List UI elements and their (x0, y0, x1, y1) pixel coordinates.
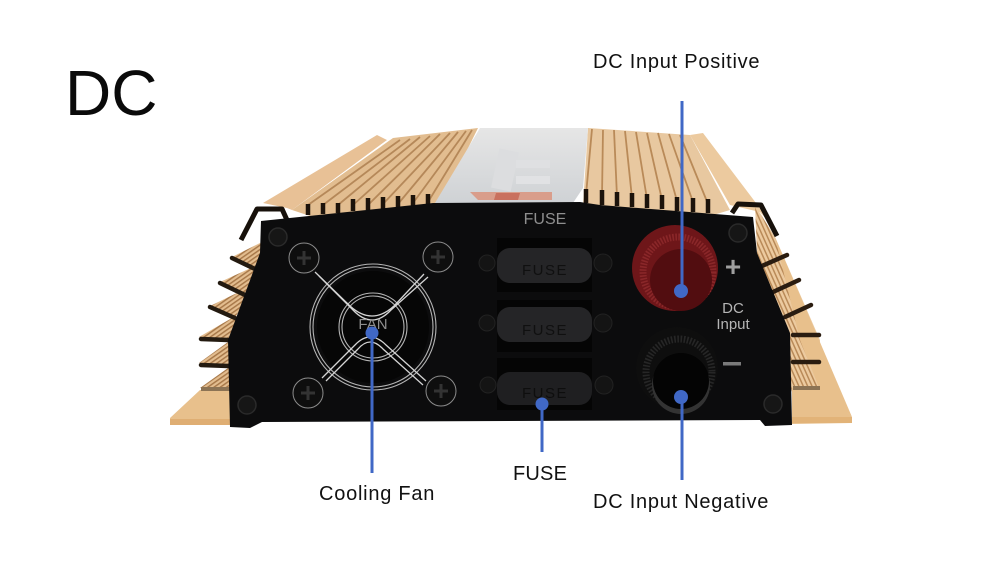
panel label: DC Input: DC (722, 300, 744, 317)
title: DC (65, 57, 157, 129)
callout: Cooling Fan: Cooling Fan (319, 483, 435, 505)
callout: DC Input Negative: DC Input Negative (593, 491, 769, 513)
fuse holders (479, 238, 613, 410)
callout: Cooling Fan (319, 326, 435, 505)
cooling fan (289, 242, 456, 408)
heat sink fins: top right (583, 128, 778, 232)
negative terminal (636, 327, 718, 414)
panel label: fuse: FUSE (524, 211, 566, 228)
panel label: minus (723, 362, 741, 366)
fan label: FAN (358, 316, 388, 333)
fuse holders: FUSE (522, 322, 568, 339)
heat sink fins: top left (263, 128, 478, 216)
fan screws (289, 242, 456, 408)
callout: FUSE: FUSE (513, 463, 567, 485)
black front panel (228, 202, 792, 428)
heat sink fins: right side (755, 205, 852, 424)
positive terminal (632, 225, 718, 311)
fuse holders: FUSE (522, 262, 568, 279)
callout: FUSE (513, 398, 567, 485)
fuse holders: FUSE (522, 385, 568, 402)
heat sink fins: left side (170, 242, 262, 425)
mounting brackets (241, 204, 777, 240)
panel label: DC Input: Input (716, 316, 751, 333)
callout: DC Input Negative (593, 390, 769, 513)
corner screws (238, 224, 782, 414)
callout: DC Input Positive: DC Input Positive (593, 51, 760, 73)
callout: DC Input Positive (593, 51, 760, 298)
inverter unit (170, 128, 852, 428)
fan guard wires (315, 272, 428, 385)
panel label: plus: + (725, 251, 741, 282)
fan guard rings (310, 264, 436, 390)
display window (435, 128, 588, 203)
